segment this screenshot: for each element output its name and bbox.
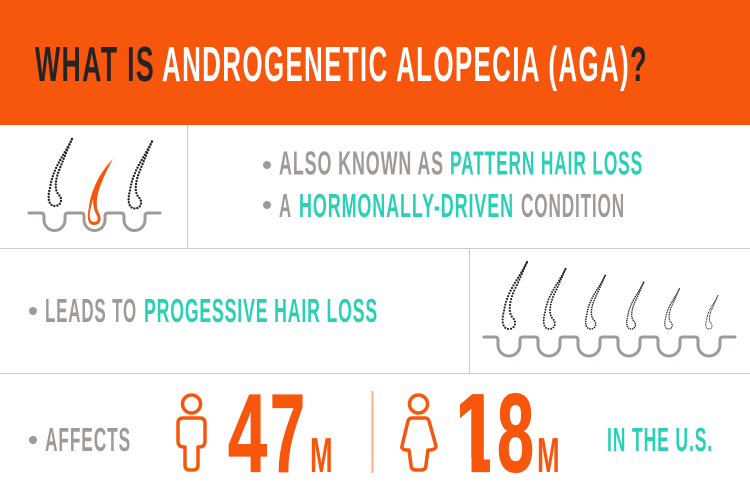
stat: 47 million men bbox=[228, 372, 334, 496]
text: hormonally-driven condition: CONDITION bbox=[521, 187, 625, 224]
stat: 47 million men: 4 bbox=[228, 372, 267, 496]
stat: 47 million men: 7 bbox=[270, 372, 305, 496]
title: ? bbox=[630, 38, 648, 92]
stat: 18 million women bbox=[460, 392, 558, 474]
title: WHAT IS bbox=[35, 38, 155, 92]
stat: 18 million women: 8 bbox=[497, 372, 534, 496]
text: progressive hair loss: LEADS TO bbox=[45, 292, 137, 329]
stat: 18 million women: 1 bbox=[452, 372, 499, 496]
icon: male figure bbox=[178, 395, 205, 470]
text: progressive hair loss: PROGESSIVE HAIR LOSS bbox=[144, 292, 378, 329]
text: affects: AFFECTS bbox=[45, 421, 131, 458]
text: hormonally-driven condition: HORMONALLY-DRIVEN bbox=[299, 187, 514, 224]
icon: hair follicles with highlighted hair bbox=[29, 139, 160, 230]
text: progressive hair loss bbox=[29, 292, 378, 329]
header banner bbox=[0, 0, 750, 125]
title bbox=[35, 38, 648, 92]
stat: 18 million women: M bbox=[537, 429, 561, 483]
icon: progressive thinning hairs bbox=[484, 262, 735, 356]
text: pattern hair loss: ALSO KNOWN AS bbox=[279, 144, 444, 182]
text: hormonally-driven condition: A bbox=[279, 187, 292, 224]
stat: 47 million men: M bbox=[310, 429, 334, 483]
icon: female figure bbox=[402, 395, 436, 470]
text: affects bbox=[29, 421, 131, 458]
